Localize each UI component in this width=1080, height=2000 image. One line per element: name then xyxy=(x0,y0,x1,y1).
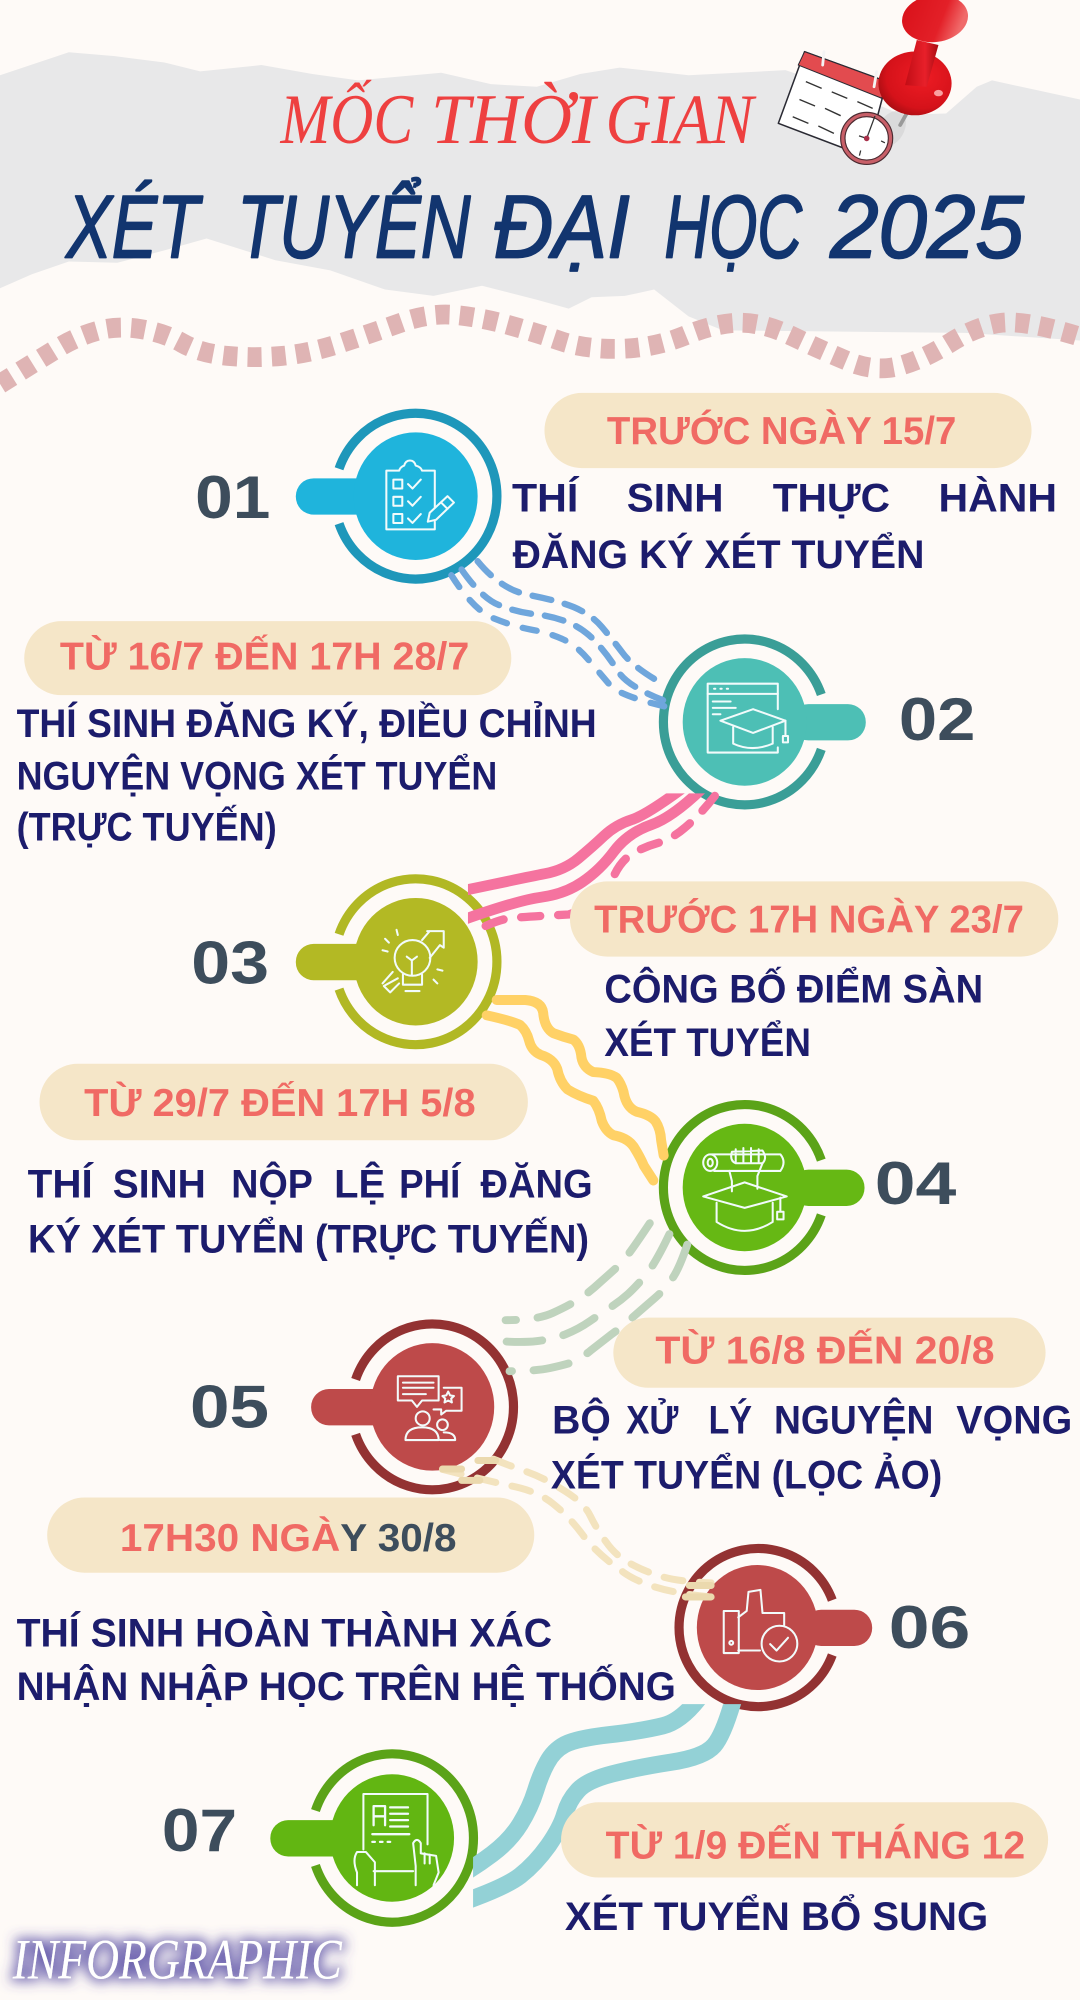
text: step 04 description: KÝ XÉT TUYỂN (TRỰC TUYẾN) xyxy=(28,1215,589,1262)
icon: people with speech bubbles xyxy=(398,1376,462,1440)
icon: browser and graduation cap xyxy=(708,684,788,753)
pill: date 03: TRƯỚC 17H NGÀY 23/7 xyxy=(594,897,1024,941)
step 05 node xyxy=(311,1324,513,1490)
text: step 06 description: THÍ SINH HOÀN THÀNH XÁC xyxy=(17,1611,552,1656)
text: step 03 description: CÔNG BỐ ĐIỂM SÀN xyxy=(604,965,983,1012)
text: step 05 description: LÝ xyxy=(709,1397,752,1443)
number 03: 03 xyxy=(191,929,269,996)
text: step 01 description: THỰC xyxy=(773,475,890,520)
pill: date 05: TỪ 16/8 ĐẾN 20/8 xyxy=(655,1329,995,1373)
text: step 04 description: NỘP xyxy=(231,1161,313,1207)
title: Mốc thời gian: THỜI xyxy=(431,80,599,159)
dashed wavy divider xyxy=(0,315,1080,384)
pill: date 06 xyxy=(47,1497,534,1573)
text: step 05 description: BỘ xyxy=(552,1397,611,1443)
number 07: 07 xyxy=(162,1797,237,1864)
text: step 01 description: HÀNH xyxy=(938,475,1057,520)
text: step 02 description: NGUYỆN VỌNG XÉT TUYỂN xyxy=(17,752,497,799)
text: step 07 description: XÉT TUYỂN BỔ SUNG xyxy=(565,1892,988,1939)
pill: date 02 xyxy=(24,621,511,695)
icon: calendar with clock and red pin xyxy=(778,0,971,164)
pill: date 07: TỪ 1/9 ĐẾN THÁNG 12 xyxy=(606,1823,1025,1867)
icon: checklist and pencil xyxy=(386,460,454,529)
step 01 node xyxy=(296,413,497,579)
arrow: pink connector 02 to 03 xyxy=(468,792,719,930)
step 07 node xyxy=(270,1754,473,1922)
arrow: sage dashed connector 04 to 05 xyxy=(486,1223,687,1371)
text: step 04 description: THÍ xyxy=(28,1162,95,1207)
arrow: yellow wavy connector 03 to 04 xyxy=(487,1000,664,1180)
arrow: blue dashed connector 01 to 02 xyxy=(451,561,671,708)
text: step 05 description: NGUYỆN xyxy=(774,1397,933,1443)
text: step 02 description: (TRỰC TUYẾN) xyxy=(17,804,277,850)
pill: date 02: TỪ 16/7 ĐẾN 17H 28/7 xyxy=(60,635,469,679)
torn paper header band xyxy=(0,52,1080,341)
step 06 node xyxy=(679,1548,872,1707)
text: step 05 description: XỬ xyxy=(626,1397,679,1443)
pill: date 04 xyxy=(40,1064,528,1140)
pill: date 03 xyxy=(570,881,1058,957)
number 01: 01 xyxy=(195,464,270,531)
number 05: 05 xyxy=(190,1373,269,1440)
pill: date 01 xyxy=(544,393,1032,468)
title: Xét tuyển đại học 2025: HỌC xyxy=(664,177,802,277)
pill: date 07 xyxy=(561,1802,1048,1878)
icon: hands holding document xyxy=(354,1794,439,1885)
title: Xét tuyển đại học 2025: TUYỂN xyxy=(237,177,471,277)
icon: thumbs up and check xyxy=(724,1590,797,1661)
title: Xét tuyển đại học 2025: XÉT xyxy=(65,177,203,277)
title: Mốc thời gian: MỐC xyxy=(280,79,414,159)
text: step 01 description: THÍ xyxy=(512,475,580,520)
pill: date 05 xyxy=(613,1318,1046,1388)
text: step 04 description: SINH xyxy=(113,1162,206,1207)
number 02: 02 xyxy=(899,686,975,753)
icon: light bulb and arrow xyxy=(383,930,444,992)
title: Xét tuyển đại học 2025: ĐẠI xyxy=(493,177,630,277)
text: step 02 description: THÍ SINH ĐĂNG KÝ, ĐIỀU CHỈNH xyxy=(17,700,597,746)
text: step 05 description: XÉT TUYỂN (LỌC ẢO) xyxy=(551,1451,942,1498)
text: step 06 description: NHẬN NHẬP HỌC TRÊN HỆ THỐNG xyxy=(17,1663,676,1709)
number 06: 06 xyxy=(889,1594,970,1661)
text: step 04 description: ĐĂNG xyxy=(480,1162,593,1207)
title: Mốc thời gian: GIAN xyxy=(606,80,757,159)
step 03 node xyxy=(296,879,497,1045)
arrow: teal connector 06 to 07 xyxy=(456,1691,736,1904)
arrow: cream dashed connector 05 to 06 xyxy=(442,1459,711,1597)
title: Xét tuyển đại học 2025: 2025 xyxy=(829,177,1024,277)
pill: date 04: TỪ 29/7 ĐẾN 17H 5/8 xyxy=(84,1081,476,1125)
icon: hand holding diploma over graduation cap xyxy=(703,1148,787,1231)
text: step 01 description: SINH xyxy=(627,475,724,520)
pill: date 06: 17H30 NGÀ Y 30/8 xyxy=(120,1516,456,1560)
text: step 04 description: LỆ xyxy=(334,1161,385,1207)
text: step 01 description: ĐĂNG KÝ XÉT TUYỂN xyxy=(513,530,924,577)
number 04: 04 xyxy=(875,1150,956,1217)
step 04 node xyxy=(663,1105,865,1270)
footer label: Inforgraphic: INFORGRAPHIC xyxy=(12,1928,342,1991)
text: step 05 description: VỌNG xyxy=(956,1398,1072,1443)
text: step 04 description: PHÍ xyxy=(399,1162,462,1207)
text: step 03 description: XÉT TUYỂN xyxy=(604,1018,811,1065)
step 02 node xyxy=(663,639,866,805)
pill: date 01: TRƯỚC NGÀY 15/7 xyxy=(607,409,956,453)
